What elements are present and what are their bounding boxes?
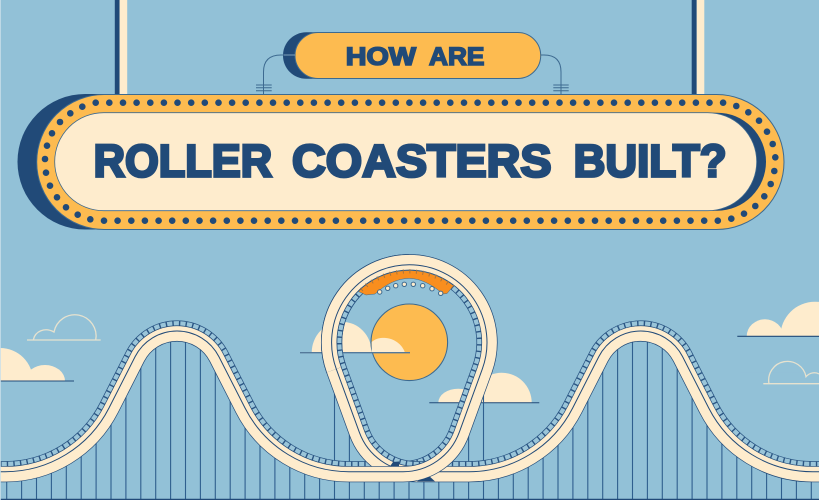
left edge highlight	[0, 0, 2, 500]
support columns	[7, 334, 811, 499]
small sign: how are	[283, 32, 541, 79]
car wheels	[378, 282, 443, 295]
left cable	[256, 55, 291, 94]
heading: roller coasters built: BUILT?	[574, 136, 727, 187]
sun	[371, 304, 448, 381]
marquee inner shadow crescent	[55, 113, 766, 211]
cloud: large dome behind sun	[312, 322, 372, 353]
marquee inner panel	[55, 113, 757, 211]
marquee light bulbs	[42, 99, 779, 224]
shadow wedge: upper crossing	[390, 462, 399, 466]
heading: roller coasters built: COASTERS	[292, 136, 552, 187]
track: first hill and rising side of loop, rails on top	[0, 262, 490, 474]
roller coaster car	[358, 270, 454, 295]
marquee shadow	[18, 94, 238, 230]
car tie marks	[361, 271, 453, 290]
main marquee sign	[18, 94, 784, 230]
heading: how are	[346, 43, 484, 71]
ground line	[0, 498, 819, 500]
shadow wedge: lower crossing	[417, 475, 435, 481]
cloud: outline lower right	[763, 361, 819, 384]
marquee body	[37, 94, 784, 230]
right cable	[540, 55, 569, 94]
heading: how are: HOW	[346, 43, 416, 71]
right sign pole	[692, 0, 704, 95]
track: descending side of loop and second hill	[329, 262, 819, 474]
cloud: outline upper left	[27, 315, 101, 340]
cloud: cream upper right	[737, 302, 819, 372]
track: first hill and rising side of loop, ties	[0, 272, 480, 464]
cloud: right of loop	[429, 373, 540, 435]
cloud: small dome over sun with base line	[300, 338, 410, 353]
cloud: cream lower left	[0, 348, 80, 421]
heading: roller coasters built: ROLLER	[94, 136, 272, 187]
heading: how are: ARE	[429, 43, 484, 71]
left sign pole	[115, 0, 127, 95]
heading: roller coasters built	[94, 136, 727, 187]
car body	[358, 270, 454, 295]
